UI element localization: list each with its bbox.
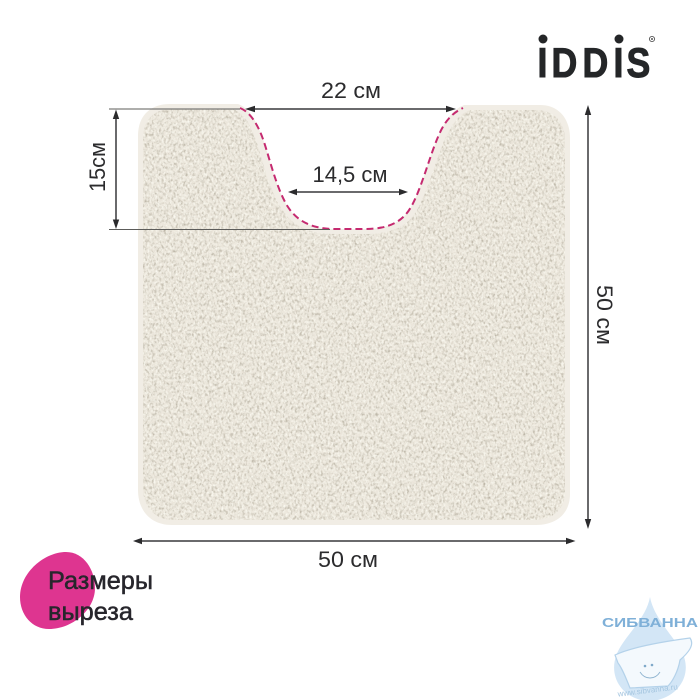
bath mat [138,104,570,525]
dimension arrow: 14,5 см [288,189,408,195]
dimension arrow: bottom 50 см [133,538,576,544]
bathtub [615,638,692,688]
callout: pink blob with heading [20,552,153,629]
dimension: cut-out height guide lines [109,109,330,230]
label: bottom 50 см: 50 см [318,547,378,572]
dimension arrow: 22 см [245,106,456,112]
heading: Размеры выреза: Размеры [48,567,153,595]
label: 14,5 см: 14,5 см [312,162,388,187]
brand name: СИБВАННА [602,615,699,630]
heading: Размеры выреза: выреза [48,598,133,626]
label: right 50 см: 50 см [592,285,617,345]
label: 15 см: 15см [85,142,110,192]
water drop [614,597,686,700]
dimension arrow: 15 см [113,110,119,229]
label: 22 см: 22 см [321,78,381,103]
dashed cut-out outline [240,108,463,229]
website: www.sibvanna.ru [616,682,678,699]
watermark: Сибванна [602,597,699,700]
dimension arrow: right 50 см [585,105,591,529]
tub face [640,664,660,678]
logo: iddis: IDDIS [538,40,650,87]
pink blob [20,552,95,629]
